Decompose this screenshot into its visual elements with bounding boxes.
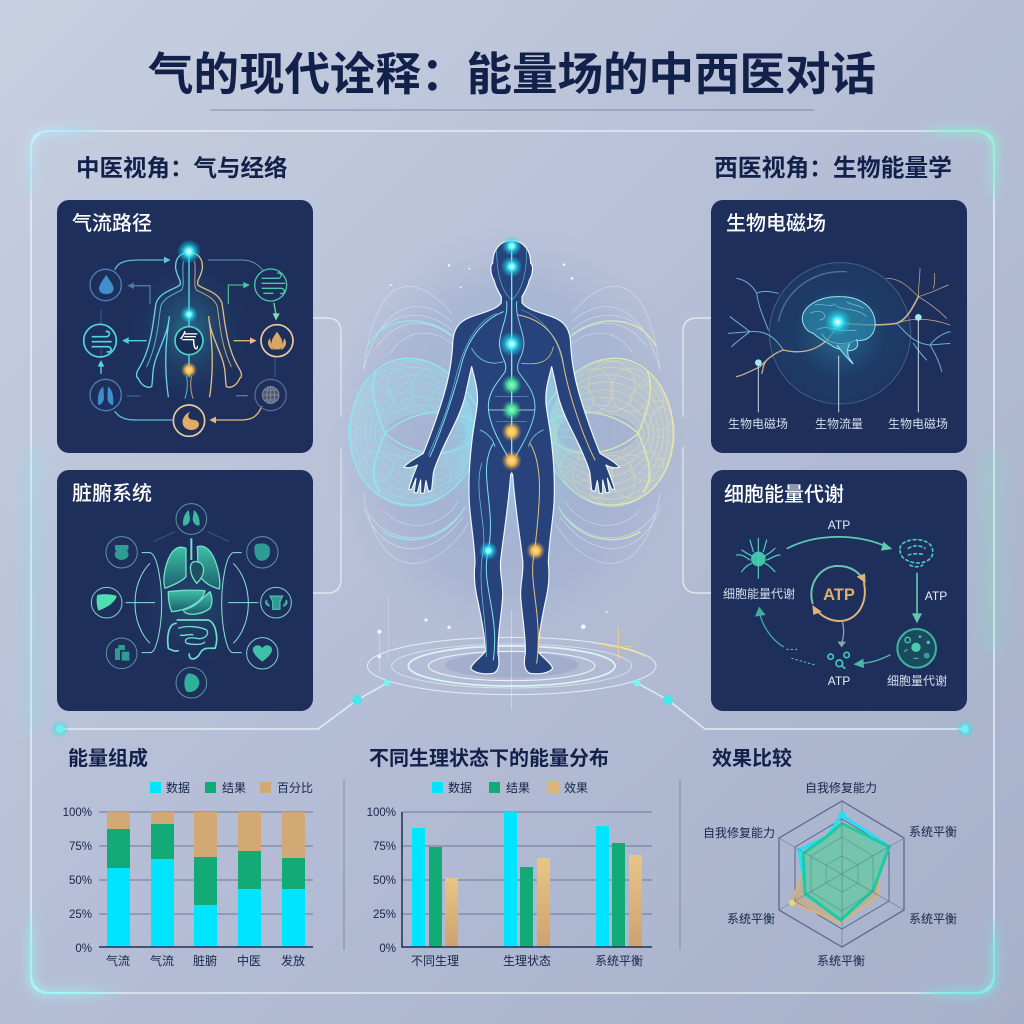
connectors to central figure: [313, 318, 711, 593]
panel: cellular energy metabolism: [711, 470, 967, 711]
main frame: [31, 131, 994, 993]
icon: kidney: [247, 537, 278, 568]
lower divider with nodes: [52, 680, 973, 737]
callout leads: [758, 317, 918, 412]
callout labels: 生物电磁场: [728, 416, 788, 431]
icon: intestine: [106, 638, 137, 669]
radar labels: [703, 780, 957, 968]
icon: neuron: [737, 538, 780, 578]
icon: lungs top: [176, 504, 207, 534]
stacked bars: [107, 812, 305, 947]
axis labels: 不同生理: [411, 954, 459, 968]
axis labels: 25%: [373, 909, 396, 921]
axis labels: 25%: [69, 909, 92, 921]
floor flare: [593, 627, 645, 660]
callout labels: [728, 416, 948, 431]
radar grid: [779, 801, 904, 947]
legend: 百分比: [277, 781, 313, 795]
arrows: [755, 537, 922, 668]
panel heading: bio-EM field: 生物电磁场: [726, 212, 826, 235]
chart heading: 能量组成: [68, 746, 148, 770]
legend: [150, 780, 313, 795]
icon: water drop: [90, 269, 121, 301]
radar labels: 系统平衡: [909, 825, 957, 839]
axis labels: [63, 807, 305, 968]
panel: qi flow path: [57, 200, 313, 453]
ATP labels: ATP: [828, 518, 850, 532]
legend: 数据: [448, 780, 472, 795]
central figure with energy field: [325, 223, 698, 710]
floor rings: [367, 597, 656, 710]
callout labels: 生物流量: [815, 417, 863, 431]
nerve main gold: [737, 268, 950, 377]
ATP labels: 细胞量代谢: [887, 673, 947, 688]
panel: organ system: [57, 470, 313, 711]
lungs and heart: [164, 538, 220, 659]
icon: molecules: [828, 652, 849, 669]
panel heading: organs: 脏腑系统: [72, 482, 152, 505]
icon: cell: [897, 629, 936, 668]
sparkles: [377, 263, 608, 658]
legend: [432, 780, 588, 795]
axis labels: 生理状态: [503, 954, 551, 968]
arrows: [98, 257, 280, 423]
ATP labels: ATP: [925, 589, 947, 603]
chart: effect comparison radar: [703, 746, 957, 968]
icon: gold lotus: [261, 325, 293, 357]
icon: heart-beat: [247, 638, 278, 669]
ATP labels: ATP: [823, 586, 855, 604]
legend: 数据: [166, 780, 190, 795]
axis labels: 100%: [63, 807, 92, 819]
grouped bars: [412, 812, 642, 947]
radar labels: 自我修复能力: [805, 780, 877, 795]
ATP labels: 细胞能量代谢: [723, 586, 795, 601]
axis labels: 0%: [75, 943, 92, 955]
ATP ring: [811, 566, 866, 621]
icon: stomach: [106, 537, 137, 568]
radar series: [779, 801, 904, 947]
legend: 效果: [564, 780, 588, 795]
axis labels: 系统平衡: [595, 954, 643, 968]
energy field: right: [547, 286, 675, 563]
icon: gold center: [173, 405, 205, 436]
body halo: [415, 277, 608, 557]
chart: energy distribution grouped bars: [367, 746, 652, 968]
nerve branches blue: [728, 278, 950, 372]
radar labels: 系统平衡: [909, 912, 957, 926]
legend: 结果: [222, 781, 246, 795]
axis labels: 发放: [281, 953, 305, 968]
ATP labels: ATP: [828, 674, 850, 688]
panel heading: metabolism: 细胞能量代谢: [724, 483, 844, 506]
section heading: TCM: 中医视角：气与经络: [76, 154, 288, 181]
diagram: ATP cycle: [737, 537, 936, 669]
diagram: qi flow body and organs cycle: 气: [179, 330, 199, 352]
axis labels: 0%: [379, 943, 396, 955]
panel heading: qi flow: 气流路径: [72, 212, 152, 235]
icon: liver: [91, 587, 122, 618]
axis labels: 100%: [367, 807, 396, 819]
axis labels: 50%: [69, 875, 92, 887]
radar labels: 系统平衡: [817, 954, 865, 968]
icon: globe: [255, 379, 286, 411]
radar labels: 自我修复能力: [703, 825, 775, 840]
diagram: organs and orbit icons: [91, 504, 291, 698]
diagram: brain in field with nerves: [728, 263, 950, 412]
axis labels: 50%: [373, 875, 396, 887]
axis labels: [367, 807, 643, 968]
legend: 结果: [506, 781, 530, 795]
chart heading: 不同生理状态下的能量分布: [369, 746, 609, 770]
background tint: [325, 223, 698, 650]
axis labels: 气流: [150, 953, 174, 968]
brain: [802, 297, 875, 364]
icon: lungs: [90, 379, 121, 411]
icon: mitochondria cloud: [900, 540, 933, 567]
icon: uterus: [261, 587, 291, 618]
chart heading: 效果比较: [712, 746, 792, 770]
axis labels: 75%: [373, 841, 396, 853]
section heading: Western medicine: 西医视角：生物能量学: [714, 155, 952, 182]
radar labels: 系统平衡: [727, 912, 775, 926]
axis labels: 中医: [237, 953, 261, 968]
energy field: left: [348, 286, 477, 563]
diagram: qi flow body and organs cycle: [84, 240, 293, 436]
ATP labels: [723, 518, 947, 688]
energy points: [479, 236, 545, 560]
icon: wind right: [255, 269, 287, 301]
chart: energy composition stacked bars: [63, 746, 313, 968]
title: 气的现代诠释：能量场的中西医对话: [148, 49, 876, 100]
axis labels: 气流: [106, 953, 130, 968]
axis labels: 75%: [69, 841, 92, 853]
axis labels: 脏腑: [193, 953, 217, 968]
icon: heart: [176, 667, 207, 698]
body: [404, 241, 619, 674]
callout labels: 生物电磁场: [888, 416, 948, 431]
panel: bio-electromagnetic field: [711, 200, 967, 453]
meridian lines: [428, 247, 595, 663]
icon: wind left: [84, 324, 116, 357]
connector arcs: [126, 532, 258, 653]
